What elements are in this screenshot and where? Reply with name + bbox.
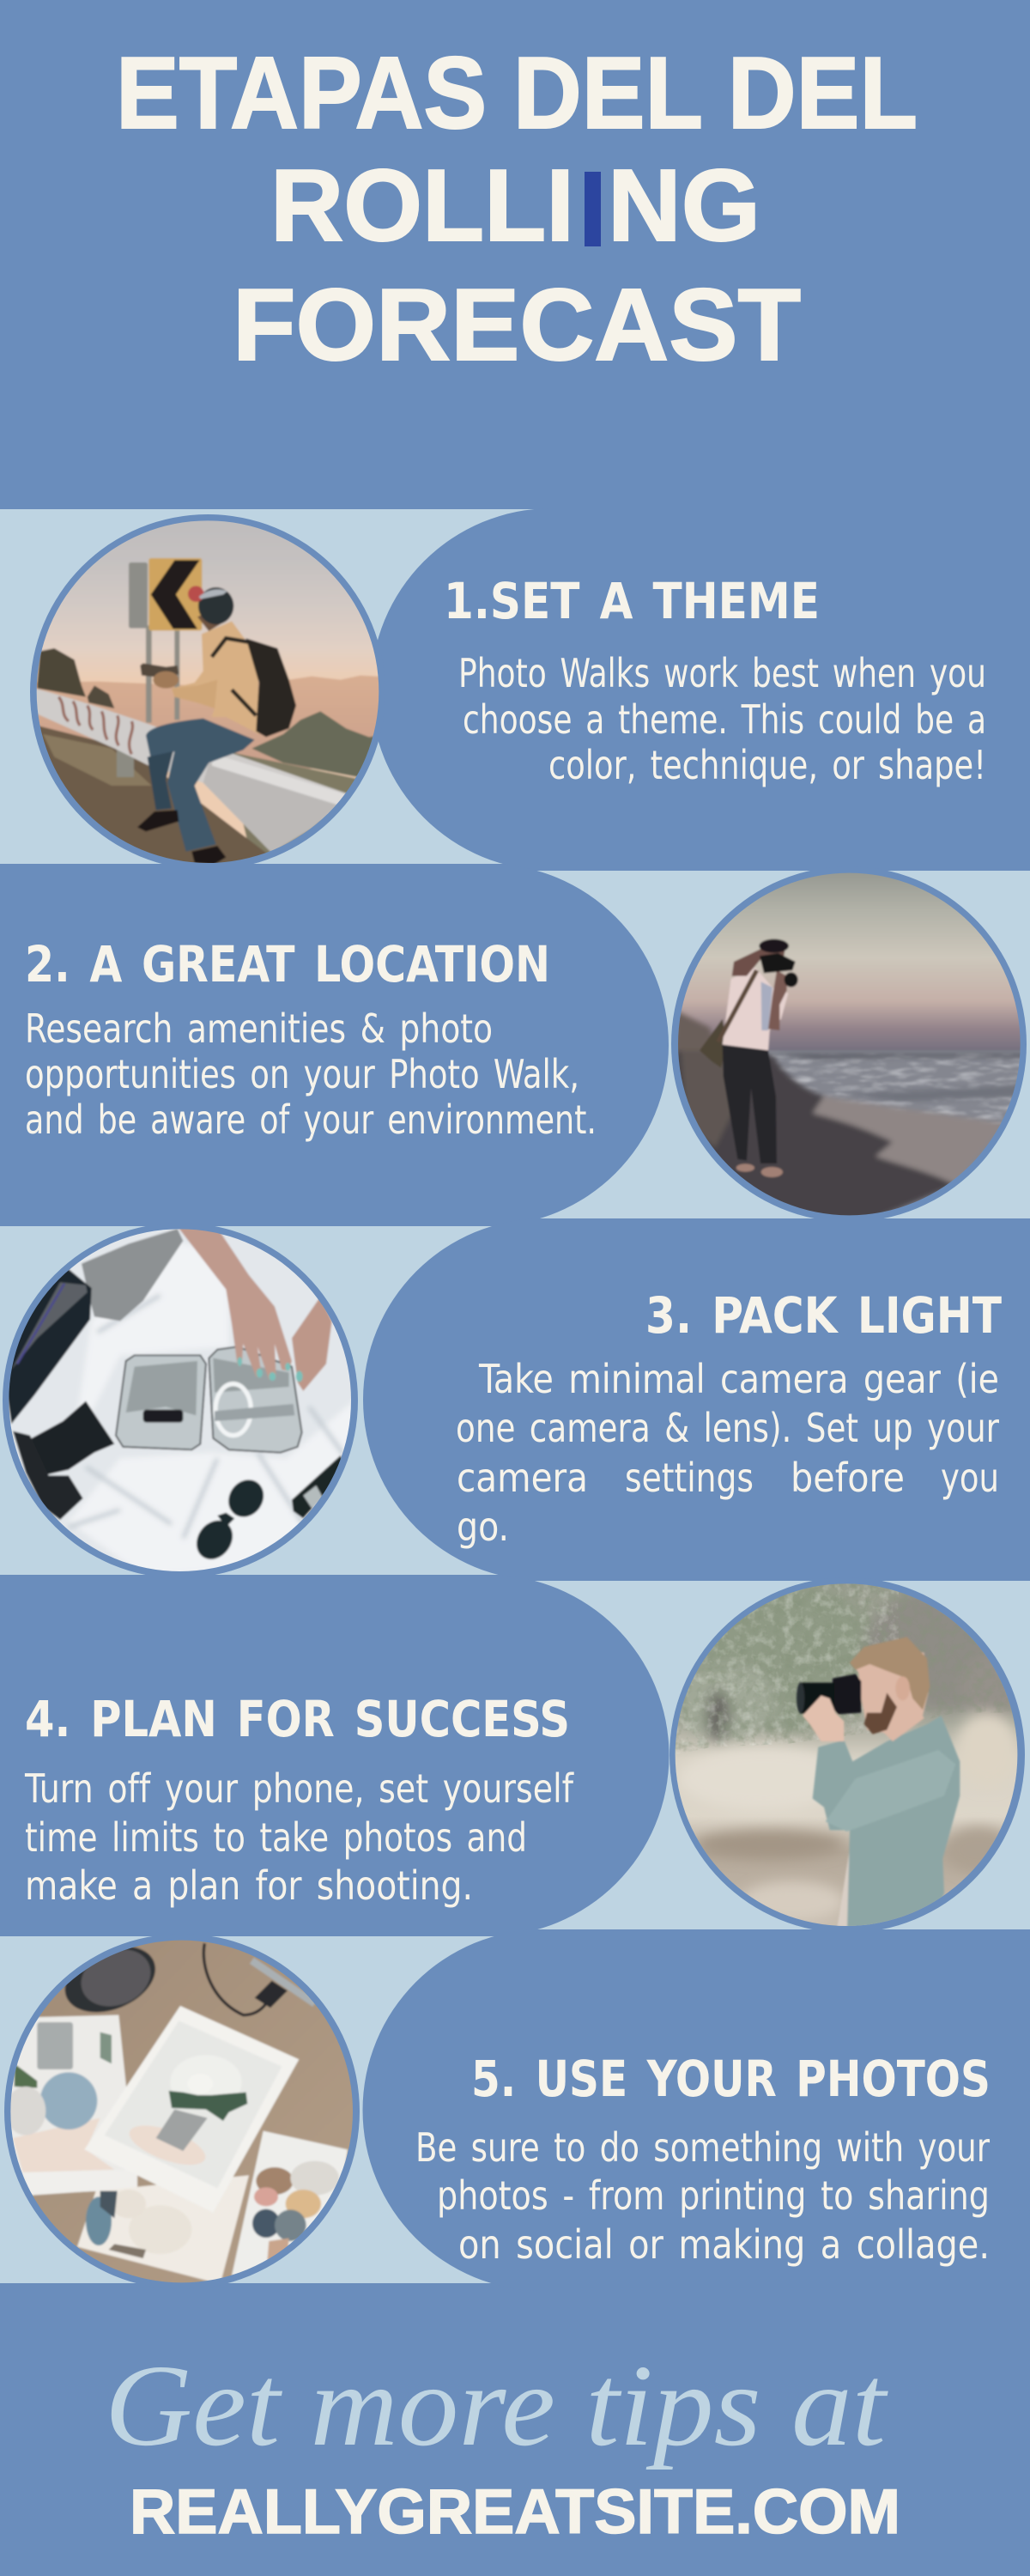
photo: printed photos on a table — [0, 1932, 360, 2293]
text: step 4: Turn off your phone, set yourself — [24, 1765, 574, 1812]
text: step 3: go. — [457, 1504, 509, 1550]
text: step 4: time limits to take photos and — [25, 1814, 527, 1861]
heading: step 3: 3. PACK LIGHT — [645, 1286, 1002, 1345]
text: step 5: photos - from printing to sharing — [437, 2172, 990, 2219]
text: step 2: and be aware of your environment. — [25, 1097, 597, 1143]
text: step 3: camera — [457, 1455, 588, 1501]
text: step 3: Take minimal camera gear (ie — [478, 1356, 999, 1402]
panel: step 5 — [0, 1929, 1030, 2293]
text: step 5 — [415, 2124, 991, 2268]
text: step 3 — [456, 1356, 1000, 1550]
heading: step 1: 1.SET A THEME — [444, 572, 820, 630]
text: step 3: settings — [625, 1455, 754, 1501]
text: step 1: color, technique, or shape! — [548, 742, 986, 788]
text: step 2: opportunities on your Photo Walk, — [25, 1051, 579, 1097]
text: step 4 — [24, 1765, 574, 1909]
photo: bearded photographer — [670, 1578, 1030, 1939]
footer: call to action — [105, 2342, 900, 2547]
heading: step 4: 4. PLAN FOR SUCCESS — [25, 1690, 570, 1748]
panel: step 4 — [0, 1575, 1030, 1939]
text: step 3: you — [941, 1455, 999, 1501]
photo: man on guardrail — [26, 511, 386, 872]
text: step 4: make a plan for shooting. — [25, 1862, 473, 1909]
text: step 5: on social or making a collage. — [458, 2221, 990, 2268]
title — [116, 36, 918, 382]
heading: step 5: 5. USE YOUR PHOTOS — [471, 2050, 991, 2108]
photo: photographer on the beach — [670, 867, 1030, 1228]
title: FORECAST — [233, 268, 801, 382]
heading: step 2: 2. A GREAT LOCATION — [25, 935, 550, 993]
title: ETAPAS DEL DEL — [116, 36, 918, 150]
text: step 1 — [458, 650, 986, 788]
footer: call to action: REALLYGREATSITE.COM — [130, 2477, 900, 2547]
title: ROLLI — [270, 149, 574, 263]
title: NG — [608, 149, 760, 263]
photo: packing camera gear — [0, 1224, 360, 1584]
panel: step 2 — [0, 864, 1030, 1228]
panel: step 3 — [0, 1218, 1030, 1584]
text: step 2 — [25, 1005, 597, 1143]
text: step 2: Research amenities & photo — [25, 1005, 493, 1052]
footer: call to action: Get more tips at — [105, 2342, 888, 2470]
panel: step 1 — [0, 508, 1030, 872]
text: step 3: before — [791, 1455, 905, 1501]
